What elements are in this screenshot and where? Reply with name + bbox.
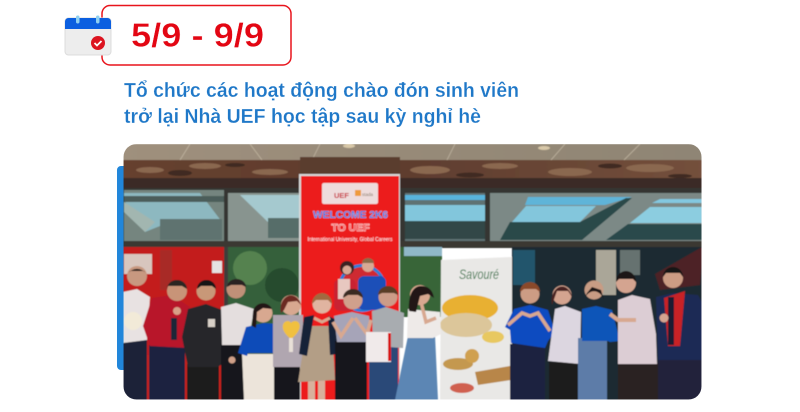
date badge: 5/9 - 9/9 [131, 16, 264, 54]
person 4: grey polo [221, 279, 254, 400]
person 6: lilac shirt with heart sign [273, 295, 303, 400]
welcome standee: UEF [334, 191, 349, 200]
person 11: blue shirt heart hands [505, 282, 555, 400]
building background [123, 144, 703, 248]
blue accent bar [117, 166, 129, 370]
lower storefront [123, 247, 702, 400]
person 10: white top floral skirt [395, 285, 441, 400]
heading [124, 80, 519, 128]
heading: Tổ chức các hoạt động chào đón sinh viên [124, 80, 519, 102]
group photo [123, 144, 703, 400]
welcome standee: WELCOME 2K6 [313, 209, 388, 221]
person 3: black shirt [182, 280, 226, 400]
savoure banner: Savouré [459, 266, 499, 282]
person 1: white shirt [123, 266, 150, 400]
infographic canvas [64, 4, 702, 400]
person 7: navy jacket plaid dress [298, 293, 339, 400]
date badge [102, 6, 291, 65]
person 15: navy suit red shirt [656, 267, 702, 400]
person 14: pink-white polo [610, 271, 658, 400]
person 9: grey shirt jeans with bag [366, 286, 404, 400]
welcome standee: International University, Global Careers [308, 237, 393, 243]
person 2: red shirt [143, 280, 190, 400]
savoure banner [440, 257, 512, 400]
person 8: lavender shirt black trousers [333, 289, 371, 400]
person 13: blue shirt jeans [578, 280, 620, 400]
welcome standee: TO UEF [331, 222, 370, 234]
person 5: blue shirt white trousers [228, 302, 275, 400]
welcome standee: stada [362, 192, 374, 197]
heading: trở lại Nhà UEF học tập sau kỳ nghỉ hè [124, 106, 481, 128]
person 12: white shirt black trousers [548, 286, 581, 400]
welcome standee [299, 174, 400, 400]
icon: calendar with check [65, 16, 111, 55]
